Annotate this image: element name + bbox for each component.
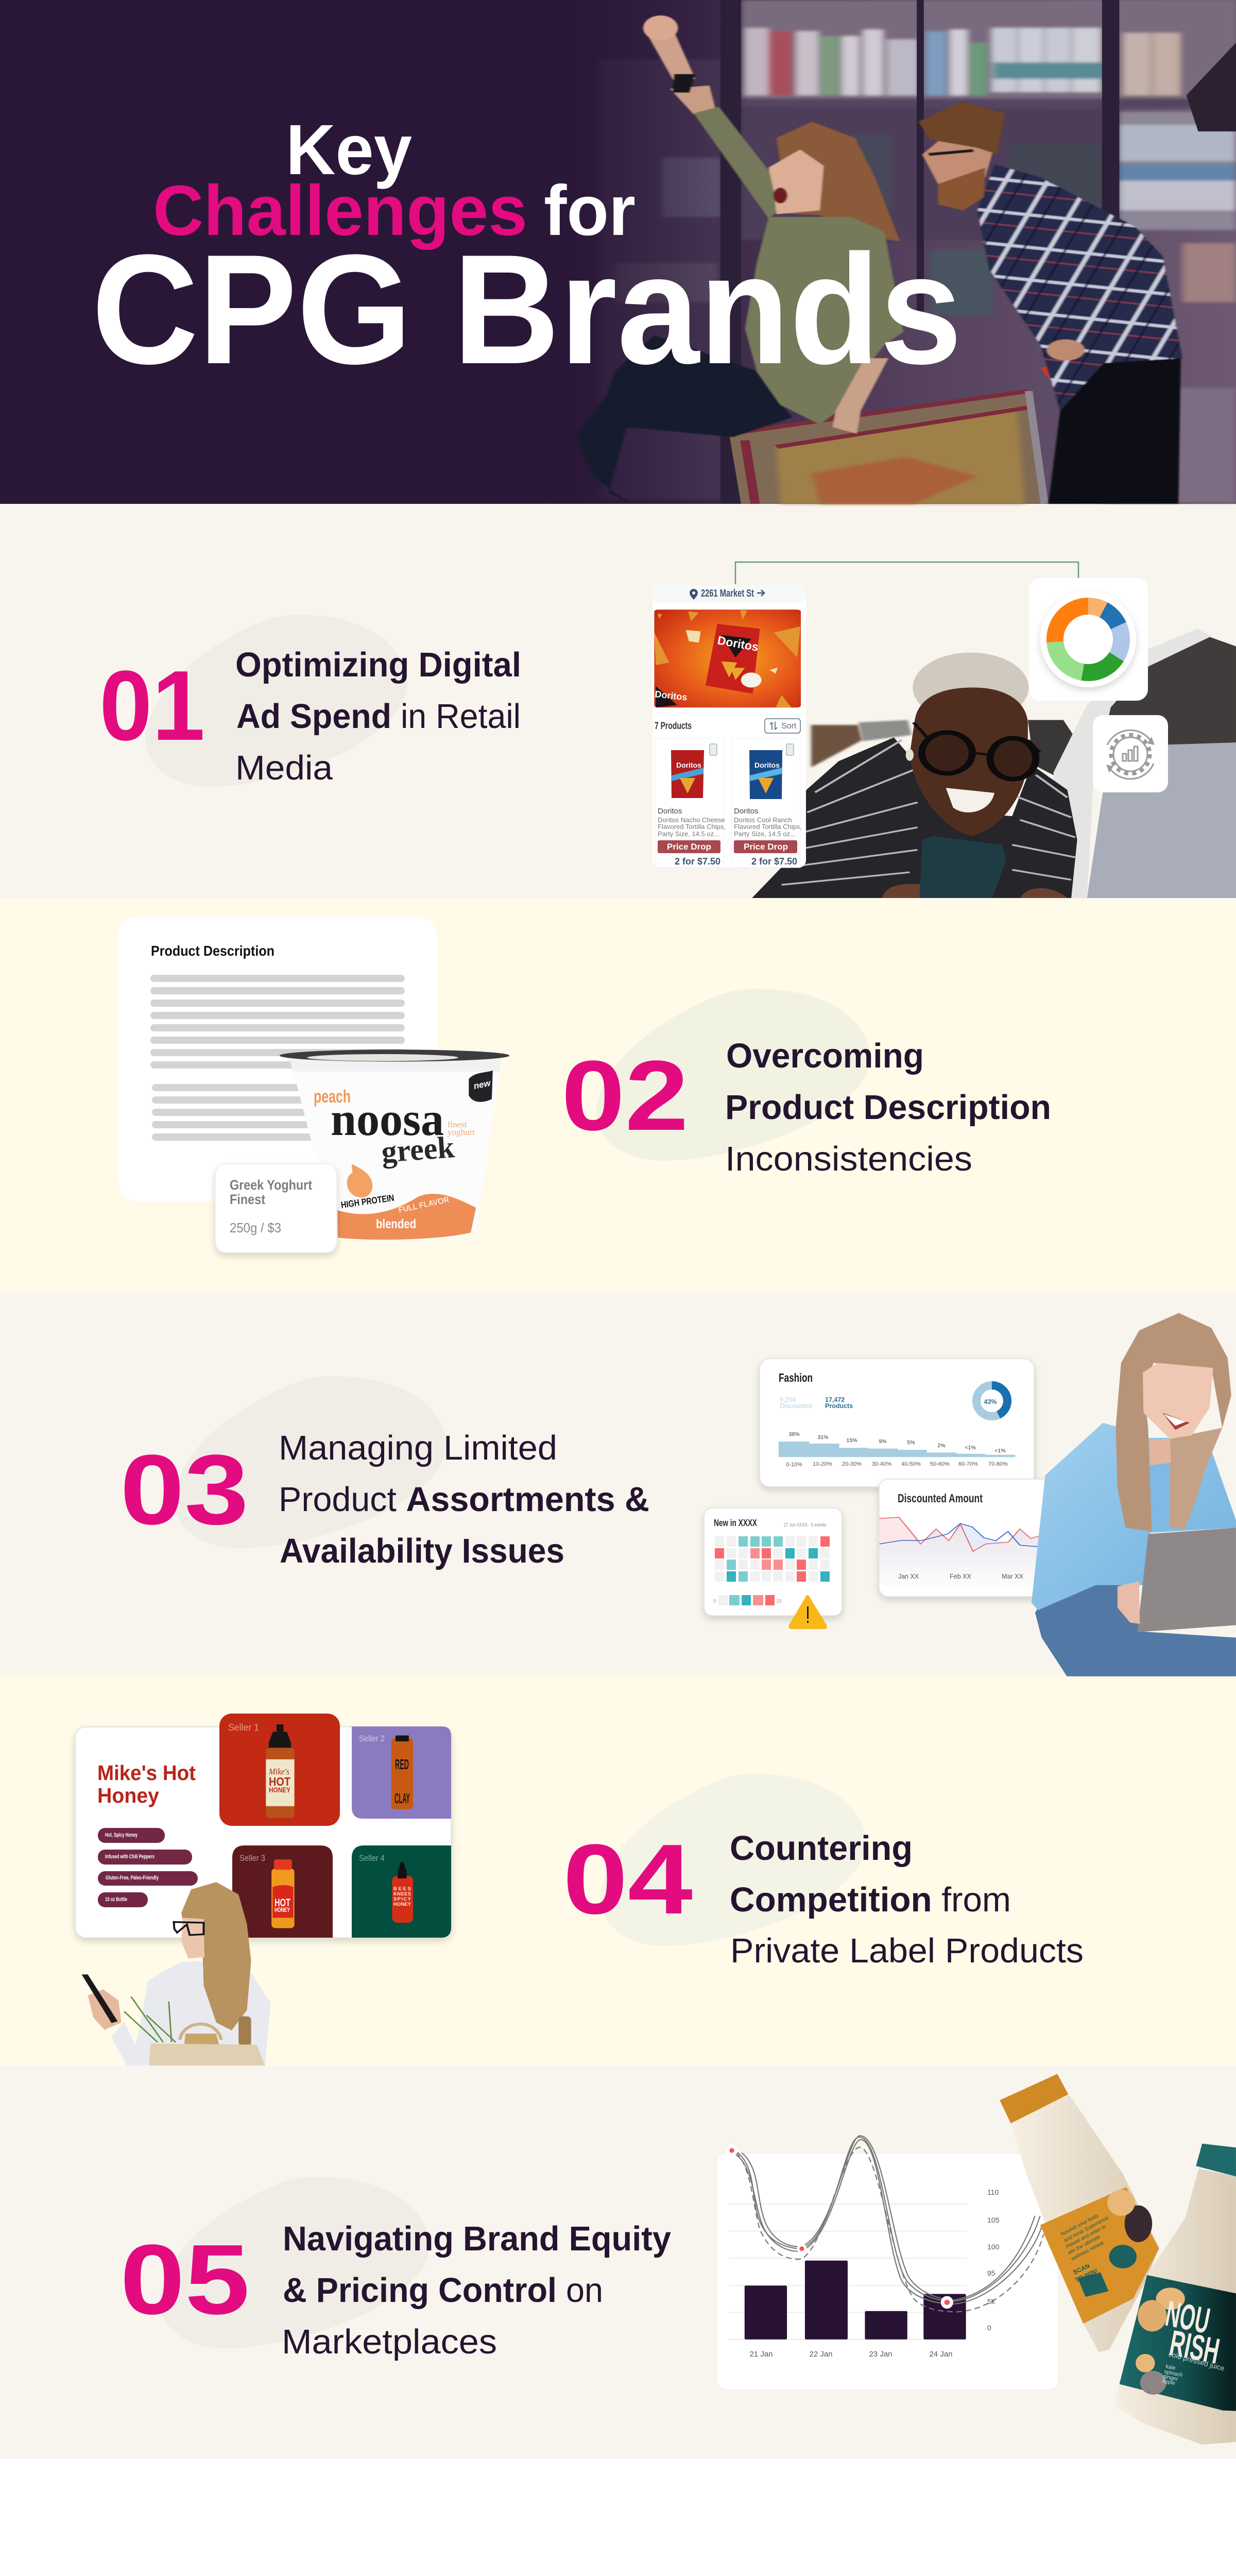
photo: woman shopping with phone and grocery bag: [82, 1882, 271, 2065]
discount histogram: 5%: [907, 1439, 915, 1446]
card: Fashion discount stats: Fashion: [779, 1371, 813, 1384]
mini donut 43%: [976, 1385, 1007, 1416]
seller 3 tile: HONEY: [274, 1906, 290, 1913]
card: store app with Doritos: Doritos: [655, 689, 688, 703]
Doritos hero banner: [654, 609, 801, 707]
seller 4 tile: [352, 1845, 451, 1938]
discounted count: Discounted: [780, 1402, 812, 1410]
bottle: NOURISH cold pressed juice: apple: [1161, 2378, 1176, 2386]
heading 03: Managing Limited: [279, 1429, 557, 1467]
discount histogram: 50-60%: [930, 1461, 950, 1467]
decorative blob 05: [160, 2177, 430, 2348]
y axis labels: 100: [987, 2243, 1000, 2251]
bottle: orange label juice: SCAN: [1072, 2262, 1091, 2276]
hero background photo: supermarket shelves and shoppers: [489, 0, 1236, 504]
feature pills: [98, 1828, 198, 1907]
card: product description document: [118, 917, 437, 1201]
bottle: orange label juice: win the ultimate: [1067, 2234, 1102, 2256]
bottle: NOURISH cold pressed juice: kale: [1165, 2363, 1176, 2371]
x axis labels: 21 Jan: [749, 2350, 773, 2359]
store address: 2261 Market St: [701, 588, 754, 599]
product card: cool ranch: 2 for $7.50: [751, 856, 797, 867]
cup label text: peach: [314, 1087, 351, 1107]
title: Key Challenges for CPG Brands: CPG Brands: [92, 223, 962, 397]
card: discounted amount line chart: Jan XX: [898, 1573, 919, 1580]
heading 05: Navigating Brand Equity: [283, 2219, 671, 2258]
shopping cart: [729, 351, 1096, 504]
yoghurt cup: greek: [380, 1130, 456, 1169]
seller 4 tile: SPICY: [393, 1896, 411, 1902]
discount histogram: 31%: [817, 1434, 829, 1440]
connector line: [735, 562, 1078, 584]
bottle: orange label juice: wellness retreat.: [1070, 2240, 1106, 2262]
sort button: [765, 719, 800, 733]
seller 1 tile: Seller 1: [228, 1722, 259, 1733]
title: Key Challenges for CPG Brands: [92, 110, 962, 397]
bottle: orange label juice: and mind. Experience: [1063, 2215, 1110, 2244]
y axis labels: 5k: [987, 2297, 995, 2306]
heading 05: [282, 2219, 671, 2361]
number 01: 01: [99, 650, 205, 761]
heading 04: Countering: [730, 1829, 913, 1868]
card: product label: 250g / $3: [230, 1220, 281, 1235]
heading 05: Marketplaces: [282, 2323, 497, 2361]
photo: woman laughing with phone: [752, 629, 1236, 898]
bars: [745, 2261, 966, 2340]
bottle: NOURISH cold pressed juice: ginger: [1162, 2373, 1179, 2382]
number 02: 02: [561, 1040, 689, 1151]
yoghurt cup: finest: [448, 1120, 467, 1129]
heading 04: Private Label Products: [730, 1931, 1084, 1970]
y axis labels: 0: [987, 2324, 991, 2332]
x axis labels: 23 Jan: [869, 2350, 892, 2359]
heatmap legend: 0: [713, 1599, 716, 1604]
product card: cool ranch: Price Drop: [744, 842, 788, 852]
heading 05: & Pricing Control on: [283, 2271, 603, 2310]
product card: nacho cheese: 2 for $7.50: [675, 856, 720, 867]
panel: 03 limited assortments: [120, 1313, 1236, 1676]
seller 2 tile: Seller 2: [359, 1734, 385, 1743]
y axis labels: 95: [987, 2269, 995, 2277]
heading 04: Competition from: [730, 1880, 1011, 1919]
discount histogram: 30-40%: [872, 1461, 891, 1467]
heading 02: Product Description: [725, 1088, 1051, 1127]
card: discounted amount line chart: Feb XX: [950, 1573, 972, 1580]
card: pricing combo chart: [717, 2136, 1058, 2389]
mini donut 43%: 43%: [984, 1398, 997, 1405]
seller 2 tile: RED: [395, 1756, 409, 1772]
heading 02: Overcoming: [726, 1037, 924, 1075]
discount histogram: 38%: [788, 1431, 800, 1437]
y axis labels: 105: [987, 2216, 1000, 2224]
price trend curves: [736, 2136, 1043, 2312]
feature pills: Infused with Chili Peppers: [105, 1854, 154, 1860]
seller 1 tile: Mike's: [268, 1767, 289, 1776]
seller 1 tile: HONEY: [269, 1786, 291, 1794]
seller 1 tile: HOT: [269, 1775, 290, 1788]
title: Key Challenges for CPG Brands: Key: [286, 110, 412, 190]
placeholder text lines: [150, 975, 405, 1141]
decorative blob 03: [174, 1376, 447, 1548]
grid lines: [729, 2204, 967, 2340]
y axis labels: 110: [987, 2188, 999, 2196]
card: product label: [215, 1164, 337, 1252]
product card: nacho cheese: Flavored Tortilla Chips,: [658, 823, 726, 831]
bottle: orange label juice: [1000, 2074, 1159, 2352]
yoghurt cup: HIGH PROTEIN: [340, 1193, 395, 1210]
product card: nacho cheese: Price Drop: [667, 842, 711, 852]
woman sitting in cart: [575, 15, 903, 504]
products count: 17,472: [825, 1396, 845, 1403]
discount histogram: 20-30%: [842, 1461, 862, 1467]
product card: cool ranch: Party Size, 14.5 oz...: [734, 830, 796, 838]
heading 01: Optimizing Digital: [235, 646, 521, 684]
panel: 02 product description inconsistencies: [118, 917, 1051, 1252]
heading 01: [235, 646, 521, 787]
card: product label: Finest: [230, 1192, 265, 1207]
product card: nacho cheese: Doritos: [658, 807, 682, 816]
discounted count: 9,204: [780, 1396, 796, 1403]
bottle: NOURISH cold pressed juice: [1114, 2144, 1236, 2445]
bottle: NOURISH cold pressed juice: spinach: [1163, 2368, 1183, 2378]
yoghurt cup: blended: [376, 1217, 416, 1231]
seller 4 tile: KNEES: [393, 1891, 411, 1897]
document heading: Product Description: [151, 943, 274, 959]
card: Mike's Hot Honey sellers: [75, 1714, 451, 1938]
discounted count: [780, 1396, 812, 1410]
seller 3 tile: Seller 3: [239, 1853, 265, 1863]
seller 2 tile: [352, 1726, 451, 1819]
seller 3 tile: HOT: [274, 1897, 290, 1909]
highlighted points: [726, 2145, 953, 2309]
title: Key Challenges for CPG Brands: Challenges: [153, 171, 527, 250]
seller 1 tile: [219, 1714, 340, 1826]
discount histogram: <1%: [965, 1445, 976, 1451]
heading 01: Media: [235, 749, 333, 787]
discount histogram: 60-70%: [958, 1461, 978, 1467]
card: product label: Greek Yoghurt: [230, 1177, 312, 1193]
discount histogram: 9%: [879, 1438, 887, 1445]
heatmap legend: [713, 1595, 782, 1605]
arrow: [757, 590, 764, 596]
card: store app with Doritos: [653, 585, 806, 868]
yoghurt cup: [280, 1049, 509, 1241]
number 03: 03: [120, 1434, 249, 1545]
heatmap legend: 15: [776, 1599, 782, 1604]
card: calendar heatmap: 27 Jun XXXX - 5 events: [784, 1522, 826, 1528]
Doritos brand text: Doritos: [716, 633, 760, 654]
title: Key Challenges for CPG Brands: for: [544, 171, 636, 250]
heading 04: [730, 1829, 1084, 1970]
card: discounted amount line chart: Mar XX: [1002, 1573, 1023, 1580]
y axis labels: [987, 2188, 1000, 2332]
card: donut chart: [1029, 578, 1148, 701]
product card: nacho cheese: Doritos Nacho Cheese: [658, 816, 725, 824]
bottle: orange label juice: Nourish your body: [1060, 2213, 1100, 2238]
product card: cool ranch: Flavored Tortilla Chips,: [734, 823, 802, 831]
feature pills: Hot, Spicy Honey: [105, 1832, 138, 1838]
card: calendar heatmap: [704, 1508, 842, 1628]
discount histogram: 70-80%: [988, 1461, 1008, 1467]
bottle: orange label juice: TO WIN!: [1074, 2267, 1099, 2284]
yoghurt cup: new: [473, 1078, 492, 1091]
panel: 01 optimizing digital ad spend: [99, 562, 1236, 898]
discount histogram: 40-50%: [901, 1461, 921, 1467]
product card: nacho cheese: Party Size, 14.5 oz...: [658, 830, 719, 838]
yoghurt cup: yoghurt: [448, 1127, 475, 1137]
product card: cool ranch: [731, 738, 802, 868]
heatmap cells: [715, 1536, 830, 1582]
card: discounted amount line chart: [879, 1479, 1054, 1597]
discount histogram: 2%: [937, 1443, 946, 1449]
decorative blob 02: [596, 989, 870, 1161]
seller 4 tile: HONEY: [393, 1902, 411, 1907]
man with plaid shirt: [918, 102, 1182, 504]
products row label: 7 Products: [655, 721, 692, 732]
discount histogram: <1%: [994, 1448, 1006, 1454]
feature pills: Gluten-Free, Paleo-Friendly: [106, 1875, 159, 1881]
seller 3 tile: [232, 1845, 333, 1938]
discount histogram: 10-20%: [813, 1461, 832, 1467]
heading 01: Ad Spend in Retail: [236, 697, 521, 736]
yoghurt cup: noosa: [331, 1093, 444, 1145]
product card: nacho cheese: [655, 738, 726, 868]
product card: nacho cheese: Doritos: [676, 761, 701, 769]
products count: [825, 1396, 853, 1410]
decorative blob 04: [600, 1774, 866, 1946]
feature pills: 10 oz Bottle: [105, 1896, 127, 1903]
number 05: 05: [120, 2224, 250, 2335]
icon: warning triangle: [790, 1597, 826, 1628]
heading 02: [725, 1037, 1051, 1178]
seller 4 tile: Seller 4: [359, 1853, 385, 1863]
x axis labels: 22 Jan: [809, 2350, 833, 2359]
heading 02: Inconsistencies: [725, 1140, 972, 1178]
x axis labels: [749, 2350, 953, 2359]
bottle: orange label juice: Hawaii and enter to: [1065, 2224, 1107, 2250]
product title: [97, 1761, 196, 1807]
number 04: 04: [563, 1823, 693, 1935]
bottle: NOURISH cold pressed juice: cold pressed juice: [1168, 2349, 1226, 2372]
heading 03: Product Assortments &: [279, 1480, 649, 1519]
card: Fashion discount stats: [760, 1359, 1034, 1487]
discount histogram: 15%: [846, 1437, 857, 1444]
product card: cool ranch: Doritos: [754, 761, 780, 769]
x axis labels: 24 Jan: [929, 2350, 953, 2359]
product title: Honey: [97, 1784, 159, 1807]
decorative blob 01: [146, 615, 407, 787]
sort button: Sort: [781, 722, 797, 731]
photo: woman with laptop: [1032, 1313, 1236, 1676]
heading 03: [279, 1429, 649, 1570]
seller 4 tile: BEES: [393, 1886, 411, 1892]
panel: 05 brand equity and pricing control: [120, 2074, 1236, 2445]
product title: Mike's Hot: [97, 1761, 196, 1785]
seller 2 tile: CLAY: [394, 1790, 410, 1806]
product card: cool ranch: Doritos Cool Ranch: [734, 816, 792, 824]
panel: hero banner: [0, 0, 1236, 504]
heading 03: Availability Issues: [280, 1532, 564, 1570]
product card: cool ranch: Doritos: [734, 807, 759, 816]
discount histogram: 0-10%: [786, 1462, 802, 1468]
yoghurt cup: FULL FLAVOR: [398, 1195, 450, 1215]
card: gear analytics icon: [1093, 715, 1168, 792]
products count: Products: [825, 1402, 853, 1410]
card: discounted amount line chart: Discounted Amount: [898, 1492, 983, 1505]
panel: 04 countering private label competition: [75, 1714, 1084, 2065]
card: calendar heatmap: New in XXXX: [714, 1518, 757, 1528]
discount histogram: [779, 1431, 1015, 1468]
